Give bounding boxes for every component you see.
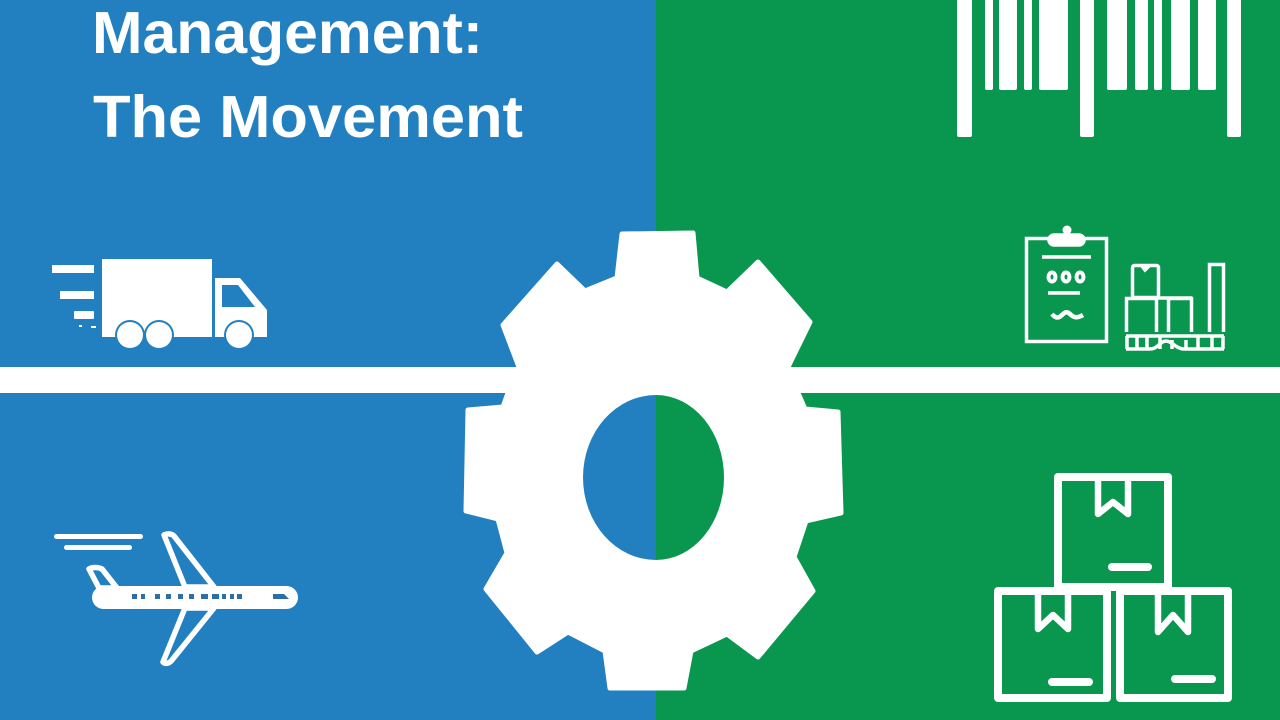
central gear [466, 233, 841, 688]
icon: barcode [957, 0, 1241, 137]
title: Management: [92, 0, 483, 66]
title: The Movement [93, 84, 523, 150]
icon: stacked boxes and pallet [1126, 264, 1224, 349]
panel: blue left background [0, 0, 656, 720]
panel: green right background [656, 0, 1280, 720]
title [92, 0, 523, 150]
horizontal white band [0, 367, 1280, 393]
icon: clipboard [1026, 226, 1106, 342]
icon: delivery truck [52, 259, 267, 350]
icon: three cardboard boxes [998, 477, 1228, 698]
icon: airplane [54, 534, 298, 663]
gear centre hole [583, 395, 724, 560]
